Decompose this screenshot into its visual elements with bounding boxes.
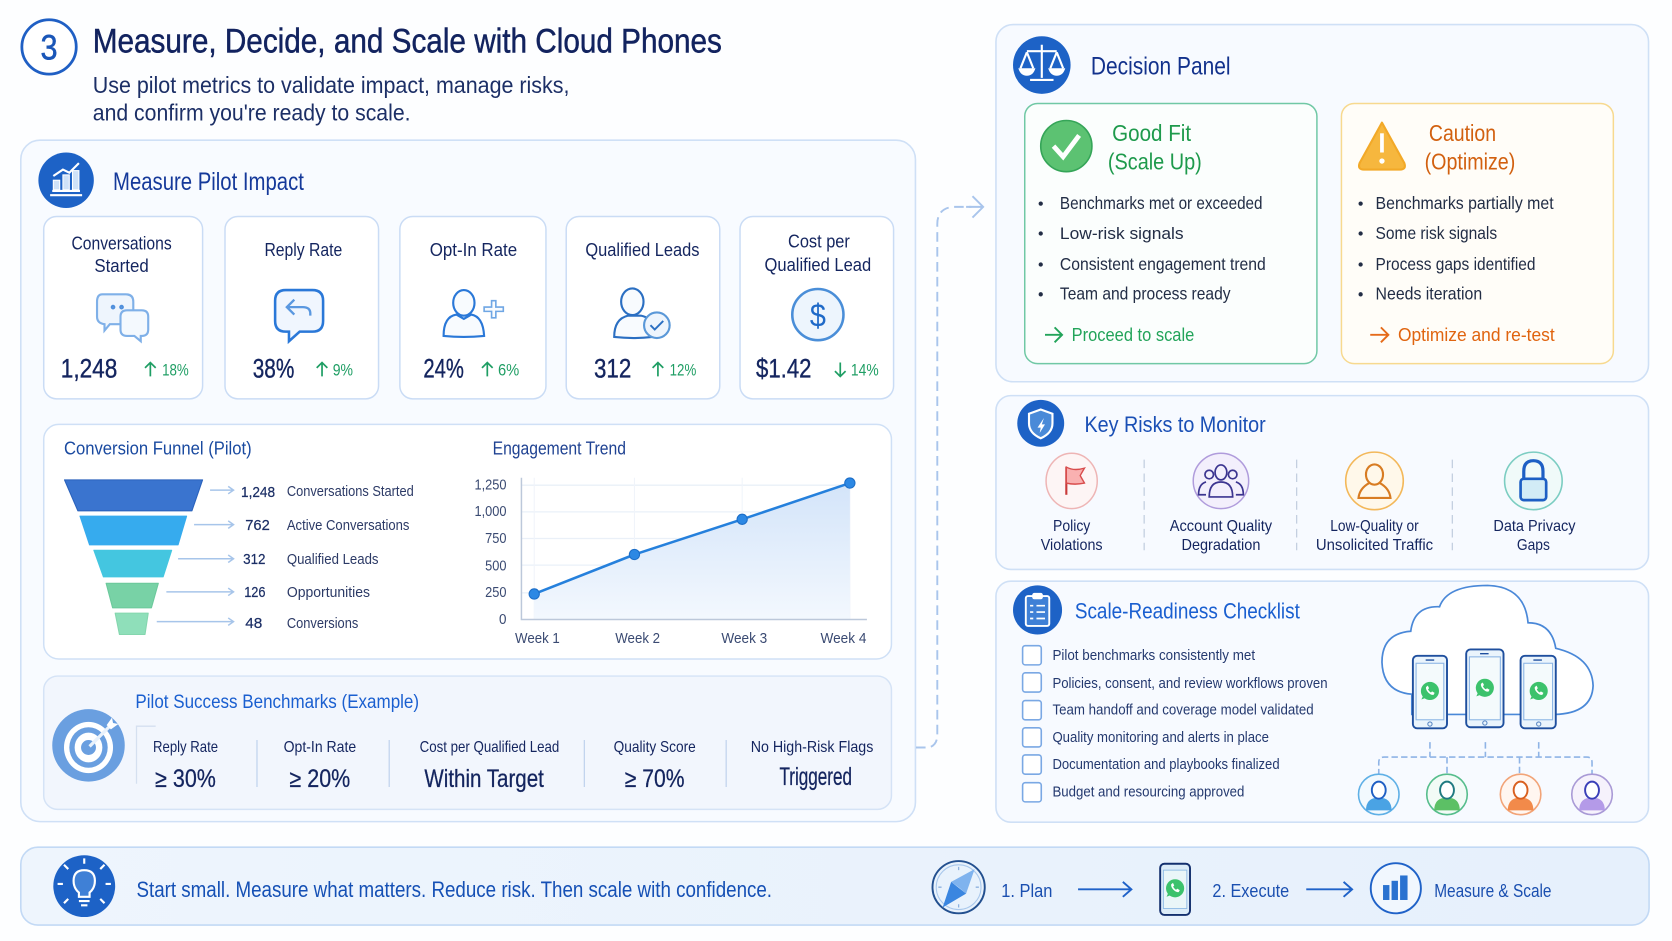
list: good fit criteria: Team and process ready [1060, 284, 1231, 304]
panel: pilot success benchmarks [44, 676, 891, 809]
risk: low-quality traffic [1316, 452, 1433, 554]
card: cost per qualified lead: $1.42 [756, 353, 811, 383]
icon: shield [1017, 400, 1064, 447]
heading: measure pilot impact: Measure Pilot Impact [113, 169, 304, 196]
chart: engagement trend line: 1,000 [475, 504, 507, 520]
heading: good fit: Good Fit [1112, 120, 1192, 146]
benchmark: quality score: Quality Score [614, 739, 696, 756]
card: conversations started: 1,248 [61, 353, 117, 383]
list: checklist items: Quality monitoring and alerts in place [1052, 729, 1269, 746]
chart: conversion funnel: 312 [243, 551, 266, 568]
heading: key risks: Key Risks to Monitor [1084, 412, 1266, 437]
trend: up 12%: 12% [670, 360, 697, 379]
icon: lightbulb [53, 855, 115, 917]
banner: bottom takeaway and steps [21, 847, 1649, 925]
heading: caution: (Optimize) [1425, 149, 1515, 175]
chart: conversion funnel: Active Conversations [287, 518, 409, 534]
card: caution [1341, 103, 1613, 364]
card: opt-in rate [400, 216, 546, 399]
list: good fit criteria: Consistent engagement trend [1060, 254, 1266, 274]
title: Measure, Decide, and Scale with Cloud Phones [93, 22, 722, 60]
card: qualified leads: 312 [594, 353, 631, 383]
list: checklist items: Team handoff and coverage model validated [1052, 701, 1314, 718]
card: opt-in rate: Opt-In Rate [430, 240, 517, 260]
subtitle: and confirm you're ready to scale. [93, 100, 411, 126]
step: execute: 2. Execute [1212, 881, 1289, 901]
benchmark: cost per qualified lead: Cost per Qualified Lead [420, 739, 559, 756]
trend: up 18%: 18% [162, 360, 189, 379]
panel: funnel and trend charts [44, 424, 891, 659]
trend: up 6% [482, 360, 520, 379]
card: qualified leads [566, 216, 720, 399]
benchmark: quality score: ≥ 70% [625, 766, 685, 793]
risk: data privacy gaps: Gaps [1517, 537, 1550, 554]
trend: down 14% [835, 360, 879, 379]
risk: account quality degradation: Account Quality [1170, 518, 1272, 535]
chart: conversion funnel: 48 [245, 615, 262, 632]
list: good fit criteria: Low-risk signals [1060, 224, 1184, 243]
chart: engagement trend line: 0 [499, 612, 507, 628]
chart: engagement trend line: 250 [485, 585, 507, 601]
icon: bar chart badge [38, 152, 94, 208]
chart: engagement trend line: Week 4 [821, 630, 866, 647]
chart: engagement trend line: Week 1 [515, 630, 560, 647]
icon: dollar coin: $ [810, 297, 826, 333]
benchmark: cost per qualified lead: Within Target [424, 766, 544, 793]
icon: chat bubbles [97, 294, 148, 341]
trend: up 12% [653, 360, 697, 379]
benchmark: opt-in rate: Opt-In Rate [284, 739, 356, 756]
heading: benchmarks: Pilot Success Benchmarks (Example) [135, 692, 419, 713]
benchmark: opt-in rate [284, 739, 356, 793]
list: checklist items: Pilot benchmarks consistently met [1052, 647, 1256, 664]
benchmark: quality score [614, 739, 696, 793]
step number badge [22, 20, 76, 74]
risk: policy violations: Policy [1053, 518, 1090, 535]
chart: engagement trend line: 750 [485, 531, 507, 547]
step: measure and scale: Measure & Scale [1434, 881, 1552, 901]
list: checklist items: Policies, consent, and review workflows proven [1052, 675, 1328, 692]
benchmark: no high-risk flags [751, 739, 873, 791]
risk: policy violations [1041, 453, 1103, 554]
icon: target [52, 709, 125, 782]
chart: engagement trend line: 500 [485, 558, 507, 574]
card: cost per qualified lead [740, 216, 894, 399]
list: checklist items: Documentation and playbooks finalized [1052, 756, 1280, 773]
chart: conversion funnel: 762 [245, 517, 270, 534]
arrow: plan to execute [1078, 882, 1131, 897]
list: caution criteria: Needs iteration [1376, 284, 1482, 304]
risk: account quality degradation [1170, 453, 1272, 554]
icon: check mark [1041, 121, 1092, 172]
card: reply rate: 38% [253, 353, 294, 383]
trend: up 9% [317, 360, 353, 379]
chart: conversion funnel: Qualified Leads [287, 552, 379, 568]
benchmark: reply rate: ≥ 30% [155, 766, 216, 793]
list: caution criteria [1358, 193, 1554, 304]
card: opt-in rate: 24% [423, 353, 464, 383]
card: reply rate: Reply Rate [264, 240, 342, 260]
benchmark: reply rate [153, 739, 218, 793]
list: caution criteria: Process gaps identified [1376, 254, 1536, 274]
heading: good fit: (Scale Up) [1108, 149, 1202, 175]
action: proceed to scale: Proceed to scale [1072, 324, 1194, 345]
trend: down 14%: 14% [851, 360, 879, 379]
risk: policy violations: Violations [1041, 537, 1103, 554]
benchmark: no high-risk flags: Triggered [779, 764, 852, 791]
icon: dollar coin [792, 289, 843, 340]
heading: good fit [1108, 120, 1202, 175]
icon: warning triangle [1359, 123, 1405, 170]
subtitle: Use pilot metrics to validate impact, manage risks, [93, 72, 569, 98]
list: checklist items: Budget and resourcing approved [1052, 784, 1244, 801]
list: caution criteria: Benchmarks partially met [1376, 193, 1554, 213]
icon: phone [1160, 864, 1190, 915]
chart: engagement trend line: Week 2 [615, 630, 660, 647]
step number badge: 3 [41, 29, 58, 68]
card: conversations started: Started [94, 256, 149, 276]
illustration: cloud with phones [1379, 585, 1593, 775]
illustration: team avatars [1358, 774, 1612, 815]
icon: balance scale [1013, 36, 1071, 94]
trend: up 6%: 6% [498, 360, 520, 379]
trend: up 9%: 9% [333, 360, 353, 379]
card: cost per qualified lead: Qualified Lead [765, 255, 871, 275]
takeaway text: Start small. Measure what matters. Reduce risk. Then scale with confidence. [136, 877, 772, 902]
chart: conversion funnel: Conversations Started [287, 484, 414, 500]
trend: up 18% [145, 360, 189, 379]
heading: engagement trend: Engagement Trend [493, 438, 626, 458]
heading: caution [1425, 120, 1515, 175]
icon: bars circle [1371, 863, 1421, 913]
list: caution criteria: Some risk signals [1376, 223, 1497, 243]
card: conversations started: Conversations [71, 234, 172, 254]
heading: decision panel: Decision Panel [1091, 54, 1231, 81]
panel: decision panel [996, 25, 1649, 382]
icon: reply bubble [275, 290, 323, 341]
icon: verified user [614, 288, 670, 338]
list: checklist items [1023, 646, 1328, 802]
panel: measure pilot impact [21, 140, 915, 822]
arrow: execute to measure [1306, 882, 1352, 897]
action: optimize and re-test: Optimize and re-test [1398, 324, 1555, 345]
icon: add user [444, 290, 503, 337]
card: cost per qualified lead: Cost per [788, 231, 850, 251]
benchmark: no high-risk flags: No High-Risk Flags [751, 739, 873, 756]
risk: low-quality traffic: Unsolicited Traffic [1316, 537, 1433, 554]
arrow: dashed connector to decision panel [916, 196, 983, 748]
icon: compass [933, 861, 985, 913]
panel: key risks to monitor [996, 396, 1649, 569]
chart: conversion funnel: Conversions [287, 616, 358, 632]
heading: conversion funnel: Conversion Funnel (Pilot) [64, 438, 252, 458]
chart: conversion funnel: 1,248 [241, 484, 275, 501]
chart: engagement trend line [475, 477, 867, 647]
list: good fit criteria: Benchmarks met or exceeded [1060, 193, 1263, 213]
risk: low-quality traffic: Low-Quality or [1330, 518, 1419, 535]
benchmark: reply rate: Reply Rate [153, 739, 218, 756]
subtitle [93, 72, 569, 126]
step: plan: 1. Plan [1001, 881, 1052, 901]
benchmark: opt-in rate: ≥ 20% [290, 766, 350, 793]
chart: conversion funnel [65, 480, 414, 634]
risk: data privacy gaps: Data Privacy [1493, 518, 1576, 535]
heading: checklist: Scale-Readiness Checklist [1075, 598, 1301, 623]
risk: data privacy gaps [1493, 452, 1576, 554]
chart: engagement trend line: 1,250 [475, 477, 507, 493]
heading: caution: Caution [1429, 120, 1496, 146]
benchmark: cost per qualified lead [420, 739, 559, 793]
chart: conversion funnel: 126 [244, 584, 266, 601]
list: good fit criteria [1039, 193, 1266, 304]
icon: clipboard [1013, 585, 1062, 634]
panel: scale-readiness checklist [996, 581, 1649, 822]
risk: account quality degradation: Degradation [1181, 537, 1260, 554]
card: good fit [1025, 103, 1317, 364]
chart: engagement trend line: Week 3 [721, 630, 767, 647]
card: conversations started [44, 216, 203, 399]
card: qualified leads: Qualified Leads [585, 240, 700, 260]
card: reply rate [225, 216, 379, 399]
chart: conversion funnel: Opportunities [287, 585, 370, 601]
